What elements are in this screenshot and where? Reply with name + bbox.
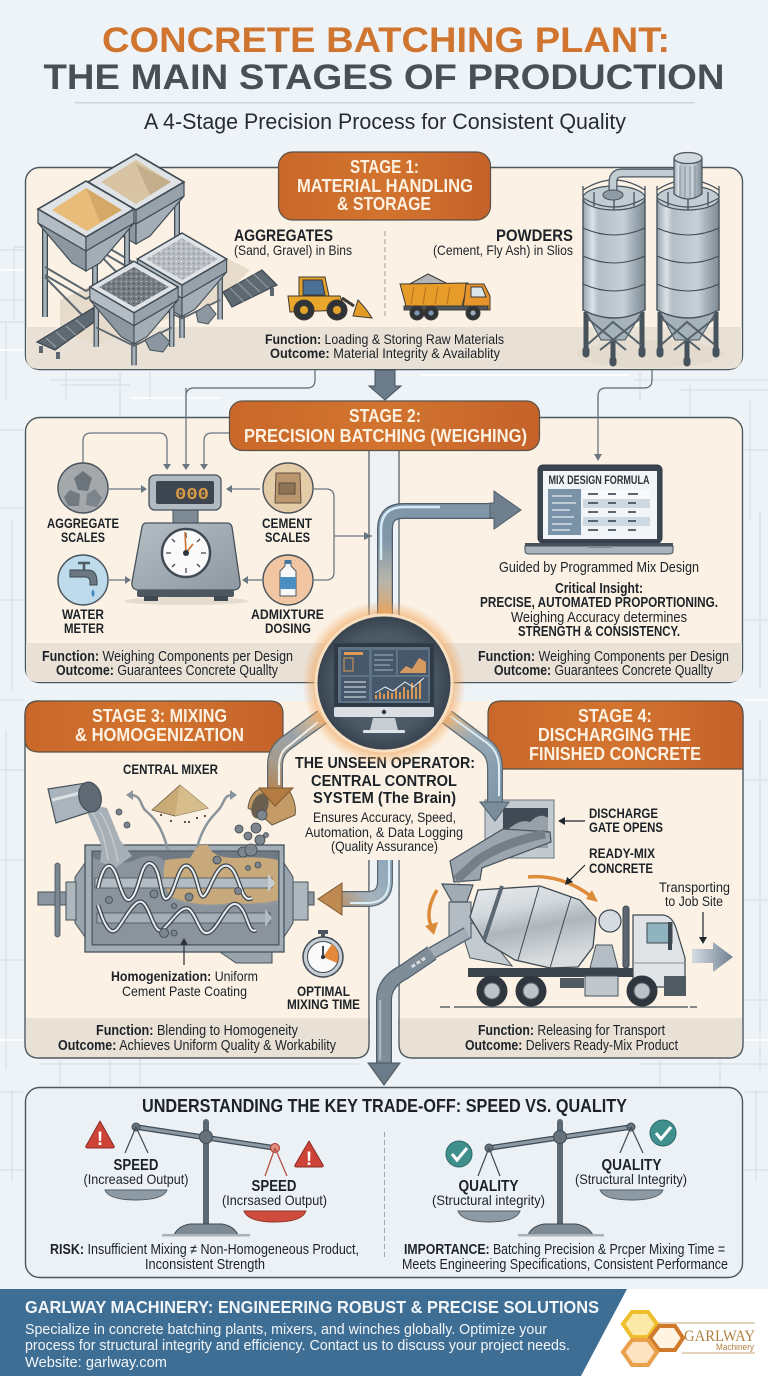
- formula table: [548, 489, 650, 535]
- homogenization callout: Cement Paste Coating: [122, 983, 247, 999]
- stage 1 footer text: Function: Loading & Storing Raw Materials: [265, 331, 504, 347]
- stage 3 and centre background: [25, 701, 384, 1058]
- grey material mass: [93, 856, 278, 944]
- water label: METER: [64, 621, 104, 636]
- water label: WATER: [62, 607, 104, 622]
- central control system text: Automation, & Data Logging: [305, 824, 463, 840]
- admixture label: DOSING: [265, 621, 311, 636]
- icon: water meter: [58, 555, 108, 636]
- icon: wheel loader: [288, 277, 372, 320]
- digital display: 000: [175, 486, 209, 505]
- laptop caption and critical insight: [480, 560, 718, 640]
- homogenization callout: [111, 938, 258, 999]
- formula title: MIX DESIGN FORMULA: [548, 475, 650, 487]
- stage 3 footer text: [58, 1023, 337, 1054]
- quality labels: QUALITY: [458, 1178, 519, 1195]
- central channel lower: [370, 860, 398, 1018]
- title line 1: CONCRETE BATCHING PLANT:: [102, 21, 670, 60]
- icon: warning right: [295, 1141, 323, 1170]
- conveyor left: [37, 308, 97, 359]
- risk text: RISK: Insufficient Mixing ≠ Non-Homogeneous Product,: [50, 1242, 359, 1258]
- icon: cement scales: [262, 463, 313, 545]
- stopwatch label: [287, 984, 360, 1012]
- powders label: POWDERS: [496, 227, 573, 245]
- balance: speed: [105, 1122, 306, 1236]
- stage 3 badge: [25, 701, 283, 752]
- banner body text: [25, 1321, 570, 1371]
- quality labels: [432, 1157, 687, 1208]
- powders label: [433, 227, 573, 258]
- stopwatch label: OPTIMAL: [297, 984, 350, 999]
- stage 4 footer text: Outcome: Delivers Ready-Mix Product: [465, 1038, 678, 1054]
- icon: warning right: !: [306, 1149, 312, 1170]
- stage 1 badge: & STORAGE: [337, 194, 431, 214]
- banner body text: Specialize in concrete batching plants, mixers, and winches globally. Optimize your: [25, 1321, 547, 1338]
- stage 3 badge: & HOMOGENIZATION: [75, 725, 244, 745]
- stage 3 badge: STAGE 3: MIXING: [92, 706, 227, 726]
- stage 2 badge: [230, 401, 540, 450]
- icon: aggregate bins: [37, 154, 277, 365]
- tan inlet chute: [248, 788, 295, 825]
- banner body text: process for structural integrity and efficiency. Contact us to discuss your project needs.: [25, 1337, 570, 1354]
- icon: admixture dosing: [251, 555, 324, 636]
- arrow: control system to mixer: [318, 860, 389, 915]
- stage 4 footer text: [465, 1023, 678, 1054]
- truck wheels: [476, 976, 658, 1006]
- stage 2 right footer text: [478, 649, 729, 679]
- title: [44, 21, 724, 97]
- stage 4 and centre background: [384, 701, 743, 1058]
- icon: warning left: !: [97, 1129, 103, 1150]
- speed labels: SPEED: [252, 1178, 296, 1195]
- arrow: stage 1 to stage 2: [369, 370, 401, 400]
- monitor dashboard: [341, 650, 428, 701]
- icon: warning left: [86, 1121, 114, 1150]
- stage 4 badge: [488, 701, 743, 769]
- stage 3 footer text: Function: Blending to Homogeneity: [96, 1023, 299, 1039]
- central control system text: SYSTEM (The Brain): [313, 790, 456, 807]
- logo: garlway: [623, 1312, 755, 1365]
- discharge gate label: GATE OPENS: [589, 820, 663, 835]
- stage 2 footer band: [26, 643, 742, 682]
- stage 4 footer text: Function: Releasing for Transport: [478, 1023, 665, 1039]
- panel: stage 2: [26, 388, 742, 682]
- quality labels: (Structural Integrity): [575, 1171, 687, 1187]
- icon: check right: [650, 1120, 676, 1146]
- stage 4 badge: STAGE 4:: [578, 706, 652, 726]
- central control system text: CENTRAL CONTROL: [311, 773, 457, 790]
- banner heading: GARLWAY MACHINERY: ENGINEERING ROBUST & PRECISE SOLUTIONS: [25, 1297, 599, 1317]
- truck chassis: [468, 968, 633, 977]
- transporting label and arrow: Transporting: [659, 880, 730, 895]
- ready-mix label: CONCRETE: [589, 861, 653, 876]
- icon: central control monitor: [302, 601, 466, 765]
- trade-off heading: UNDERSTANDING THE KEY TRADE-OFF: SPEED VS. QUALITY: [142, 1095, 628, 1116]
- stage 2 badge: STAGE 2:: [349, 406, 421, 426]
- panel: trade-off: [26, 1088, 742, 1278]
- stage 1 badge: [278, 152, 490, 220]
- banner body text: Website: garlway.com: [25, 1354, 167, 1371]
- central control system text: THE UNSEEN OPERATOR:: [295, 755, 475, 772]
- quality labels: QUALITY: [602, 1157, 662, 1174]
- inlet pipe: [48, 783, 96, 823]
- admixture label: [251, 607, 324, 636]
- subtitle: A 4-Stage Precision Process for Consistent Quality: [144, 109, 626, 134]
- trade-off background: [26, 1088, 742, 1278]
- arrow: control system to discharge gate: [447, 716, 509, 821]
- logo: garlway: GARLWAY: [684, 1328, 755, 1345]
- conveyor right: [223, 270, 277, 307]
- stage 2 left footer text: [42, 649, 293, 679]
- importance text: IMPORTANCE: Batching Precision & Prcper Mixing Time =: [404, 1242, 725, 1258]
- connector: stage 1 to stage 2 thin lines: [186, 370, 652, 465]
- stage 4 badge: FINISHED CONCRETE: [529, 744, 701, 764]
- stage 2 background: [26, 418, 742, 682]
- stage 2 right footer text: Outcome: Guarantees Concrete Quallty: [494, 663, 714, 679]
- ready-mix label: [565, 846, 655, 885]
- stage 4 badge: DISCHARGING THE: [538, 725, 691, 745]
- stage 2 thin connector arrows: [83, 388, 598, 580]
- risk text: Inconsistent Strength: [145, 1257, 265, 1273]
- transporting label and arrow: [659, 880, 733, 972]
- icon: discharge gate and chute: [450, 800, 554, 882]
- aggregate label: SCALES: [61, 530, 105, 545]
- laptop caption and critical insight: Weighing Accuracy determines: [511, 610, 687, 626]
- icon: silos: [576, 152, 724, 368]
- central mixer label: CENTRAL MIXER: [123, 762, 218, 777]
- central control system text: (Quality Assurance): [331, 838, 438, 854]
- stage 3 footer band: [26, 1018, 368, 1057]
- stage 3 footer text: Outcome: Achieves Uniform Quality & Workability: [58, 1038, 337, 1054]
- stage 2 left footer text: Function: Weighing Components per Design: [42, 649, 293, 665]
- ready-mix label: READY-MIX: [589, 846, 655, 861]
- stage 1 footer text: Outcome: Material Integrity & Availablity: [270, 345, 500, 361]
- stage 2 right footer text: Function: Weighing Components per Design: [478, 649, 729, 665]
- aggregate label: [47, 516, 119, 545]
- aggregates label: [234, 227, 352, 258]
- icon: aggregate scales: [47, 463, 119, 545]
- risk text: [50, 1242, 359, 1273]
- stage 2 badge: PRECISION BATCHING (WEIGHING): [244, 426, 527, 446]
- central control system text: Ensures Accuracy, Speed,: [313, 809, 456, 825]
- truck drum support: [458, 920, 512, 966]
- balance: quality: [458, 1122, 663, 1236]
- laptop caption and critical insight: Guided by Programmed Mix Design: [499, 560, 699, 576]
- mix flow arrows: [126, 790, 237, 850]
- icon: stopwatch: [287, 930, 360, 1012]
- stage 2 left footer text: Outcome: Guarantees Concrete Quallty: [56, 663, 279, 679]
- powders label: (Cement, Fly Ash) in Slios: [433, 242, 573, 258]
- stage 1 background: [26, 168, 742, 370]
- aggregates label: (Sand, Gravel) in Bins: [234, 242, 352, 258]
- laptop caption and critical insight: PRECISE, AUTOMATED PROPORTIONING.: [480, 595, 718, 611]
- admixture label: ADMIXTURE: [251, 607, 324, 622]
- icon: weighing scale: [124, 475, 248, 605]
- mixing shafts and screws: [95, 878, 272, 888]
- stopwatch label: MIXING TIME: [287, 997, 360, 1012]
- laptop caption and critical insight: Critical Insight:: [555, 581, 643, 597]
- footer banner: [0, 1289, 768, 1376]
- stream from pipe: [83, 803, 132, 868]
- panel: stage 3: [25, 701, 384, 1058]
- laptop caption and critical insight: STRENGTH & CONSISTENCY.: [518, 624, 680, 640]
- stage 4 footer band: [400, 1018, 742, 1057]
- arrow: control system to mixer input: [259, 717, 322, 806]
- discharge gate label: [558, 806, 663, 835]
- falling aggregate: [116, 809, 268, 857]
- icon: dump truck: [400, 274, 490, 320]
- central channel: [369, 450, 399, 682]
- speed labels: [84, 1157, 327, 1208]
- stage 1 footer band: [26, 327, 742, 369]
- water label: [62, 607, 104, 636]
- speed labels: SPEED: [114, 1157, 158, 1174]
- truck water tank and exhaust: [599, 910, 621, 932]
- arrow: truck concrete to trade-off panel: [368, 933, 467, 1085]
- sand pile: [152, 785, 208, 816]
- icon: central mixer: [38, 780, 314, 963]
- quality labels: (Structural integrity): [432, 1192, 545, 1208]
- stage 1 footer text: [265, 331, 504, 361]
- cement label: [262, 516, 313, 545]
- speed labels: (Increased Output): [84, 1171, 188, 1187]
- panel: stage 1: [26, 152, 742, 370]
- icon: mixer truck: [440, 884, 697, 1007]
- homogenization callout: Homogenization: Uniform: [111, 968, 258, 984]
- icon: laptop with mix design formula: [525, 465, 673, 554]
- arrow: control system to laptop: [381, 491, 521, 620]
- aggregate label: AGGREGATE: [47, 516, 119, 531]
- discharge gate label: DISCHARGE: [589, 806, 658, 821]
- cement label: CEMENT: [262, 516, 313, 531]
- importance text: [402, 1242, 728, 1273]
- truck cab: [633, 915, 685, 987]
- transporting label and arrow: to Job Site: [665, 894, 723, 909]
- aggregates label: AGGREGATES: [234, 227, 333, 245]
- tan material mass: [164, 845, 278, 906]
- central control system text: [295, 755, 475, 854]
- stage 1 badge: STAGE 1:: [350, 157, 419, 177]
- title line 2: THE MAIN STAGES OF PRODUCTION: [44, 58, 724, 97]
- panel: stage 4: [384, 701, 743, 1058]
- logo: garlway: Machinery: [716, 1342, 754, 1352]
- icon: check left: [446, 1141, 472, 1167]
- stage 1 badge: MATERIAL HANDLING: [297, 176, 473, 196]
- speed labels: (Incrsased Output): [222, 1192, 327, 1208]
- orange rotation arrows: [429, 877, 592, 928]
- cement label: SCALES: [265, 530, 310, 545]
